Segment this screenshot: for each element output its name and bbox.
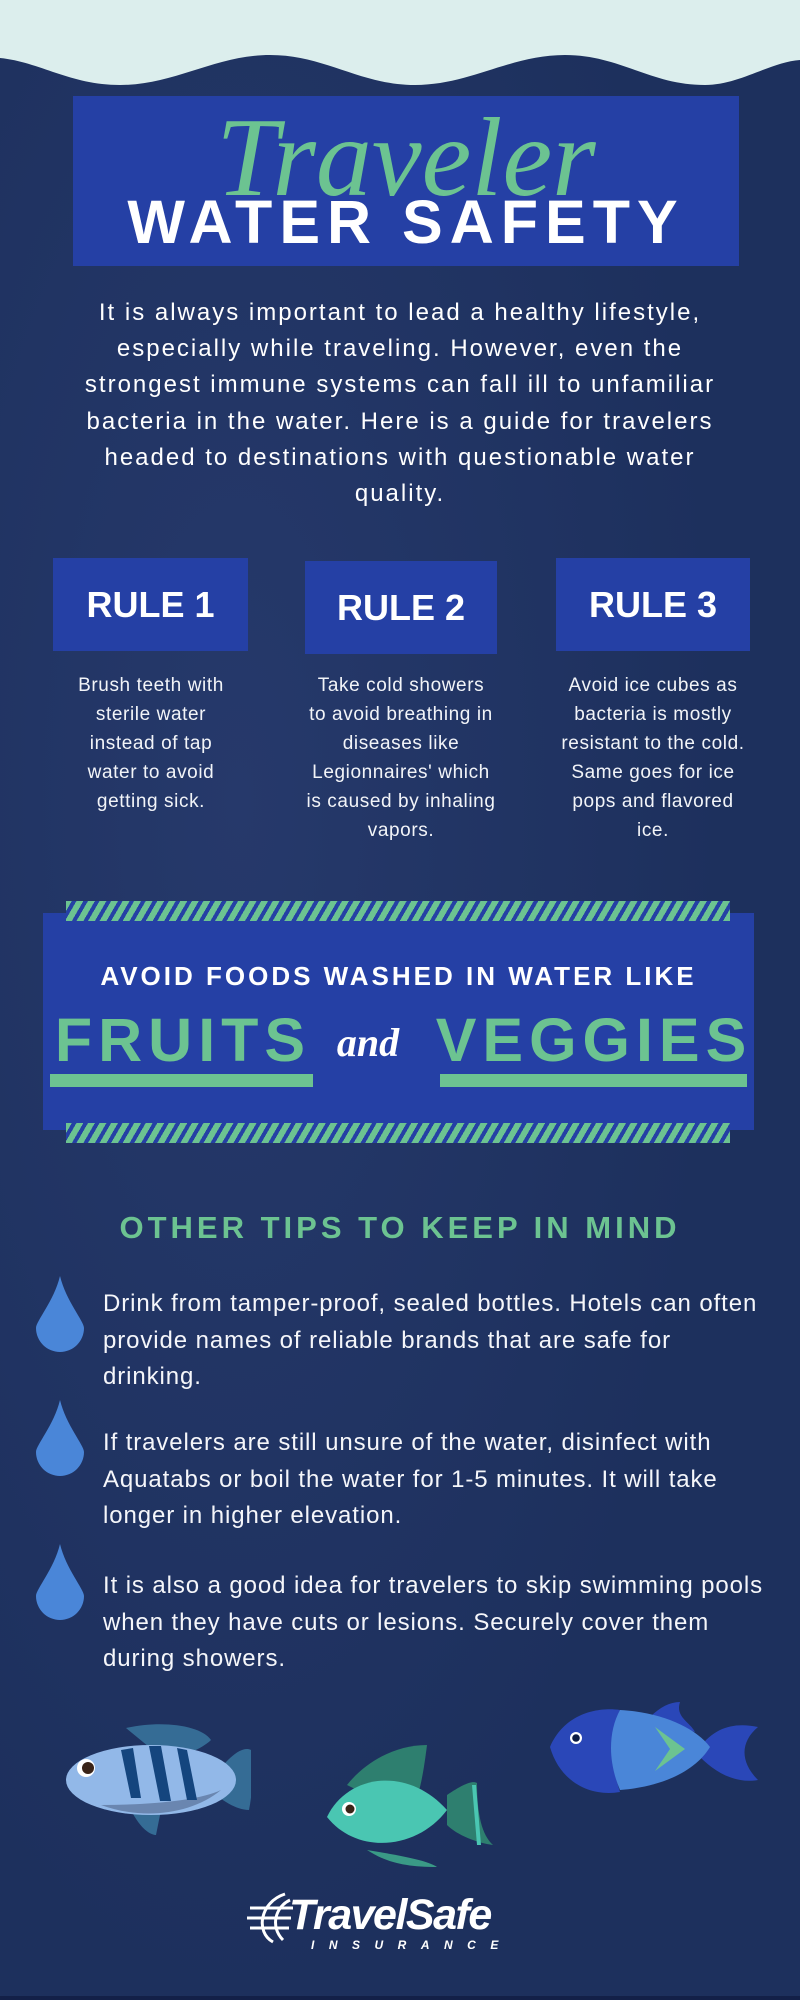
- rule 3 text: bacteria is mostly: [574, 704, 732, 725]
- tip 1: provide names of reliable brands that are safe for: [103, 1326, 671, 1354]
- icon: drop 2: [36, 1400, 84, 1476]
- icon: drop 1: [36, 1276, 84, 1352]
- tip 2: longer in higher elevation.: [103, 1502, 402, 1529]
- rule 2 heading: [305, 561, 497, 654]
- rule 2 text: is caused by inhaling: [306, 791, 496, 812]
- rule 1 text: getting sick.: [97, 791, 205, 812]
- icon: striped fish: [66, 1724, 251, 1835]
- intro paragraph: bacteria in the water. Here is a guide for travelers: [87, 408, 713, 435]
- tip 1: [103, 1290, 757, 1390]
- logo: TravelSafe Insurance: [247, 1891, 513, 1952]
- rule 2 text: Legionnaires' which: [312, 762, 490, 783]
- tip 1: Drink from tamper-proof, sealed bottles. Hotels can often: [103, 1290, 757, 1317]
- FRUITS: FRUITS: [55, 1006, 311, 1074]
- tip 3: [103, 1572, 763, 1672]
- intro paragraph: [85, 299, 715, 507]
- rule 3 text: resistant to the cold.: [561, 733, 745, 754]
- rule 3 heading: RULE 3: [589, 584, 717, 624]
- intro paragraph: headed to destinations with questionable water: [104, 444, 696, 471]
- rule 3 heading: [556, 558, 750, 651]
- banner: fruits and veggies: [43, 901, 754, 1143]
- wave header: [0, 0, 800, 85]
- rule 3 text: Avoid ice cubes as: [569, 675, 737, 696]
- intro paragraph: especially while traveling. However, even the: [117, 335, 683, 362]
- rule 1 text: sterile water: [96, 704, 206, 725]
- tip 3: It is also a good idea for travelers to skip swimming pools: [103, 1572, 763, 1599]
- tip 2: Aquatabs or boil the water for 1-5 minutes. It will take: [103, 1466, 718, 1492]
- tip 2: [103, 1429, 718, 1529]
- rule 3 text: pops and flavored: [572, 791, 734, 812]
- tip 2: If travelers are still unsure of the water, disinfect with: [103, 1429, 711, 1456]
- rule 2 text: [306, 675, 496, 841]
- rule 2 text: Take cold showers: [318, 675, 484, 696]
- rule 2 text: diseases like: [343, 733, 459, 754]
- and: and: [337, 1020, 399, 1065]
- rule 2 heading: RULE 2: [337, 586, 465, 628]
- intro paragraph: It is always important to lead a healthy lifestyle,: [99, 299, 701, 326]
- icon: drop 3: [36, 1544, 84, 1620]
- tip 3: during showers.: [103, 1645, 286, 1672]
- rule 1 text: Brush teeth with: [78, 675, 224, 696]
- tip 3: when they have cuts or lesions. Securely cover them: [103, 1608, 709, 1636]
- rule 1 text: water to avoid: [88, 762, 214, 783]
- rule 3 text: Same goes for ice: [571, 762, 735, 783]
- rule 1 heading: RULE 1: [86, 584, 215, 624]
- tip 1: drinking.: [103, 1363, 202, 1390]
- intro paragraph: quality.: [355, 480, 445, 507]
- rule 1 text: [78, 675, 224, 812]
- other tips heading: OTHER TIPS TO KEEP IN MIND: [119, 1210, 681, 1245]
- icon: globe: [247, 1892, 293, 1944]
- title box: [73, 96, 739, 266]
- title script: Traveler: Traveler: [216, 96, 596, 220]
- rule 1 heading: [53, 558, 248, 651]
- title: WATER SAFETY: WATER SAFETY: [127, 188, 685, 256]
- intro paragraph: strongest immune systems can fall ill to unfamiliar: [85, 371, 715, 398]
- logo: TravelSafe Insurance: INSURANCE: [311, 1938, 513, 1952]
- rule 2 text: vapors.: [368, 820, 434, 841]
- rule 3 text: [561, 675, 745, 841]
- VEGGIES: VEGGIES: [436, 1006, 752, 1074]
- rule 2 text: to avoid breathing in: [309, 704, 493, 725]
- underlines: [50, 1074, 313, 1087]
- logo text: TravelSafe: [289, 1891, 491, 1939]
- rule 3 text: ice.: [637, 820, 669, 841]
- rule 1 text: instead of tap: [90, 733, 212, 754]
- banner heading: AVOID FOODS WASHED IN WATER LIKE: [100, 961, 697, 991]
- icon: green fish: [327, 1745, 493, 1867]
- icon: blue fish: [550, 1702, 758, 1793]
